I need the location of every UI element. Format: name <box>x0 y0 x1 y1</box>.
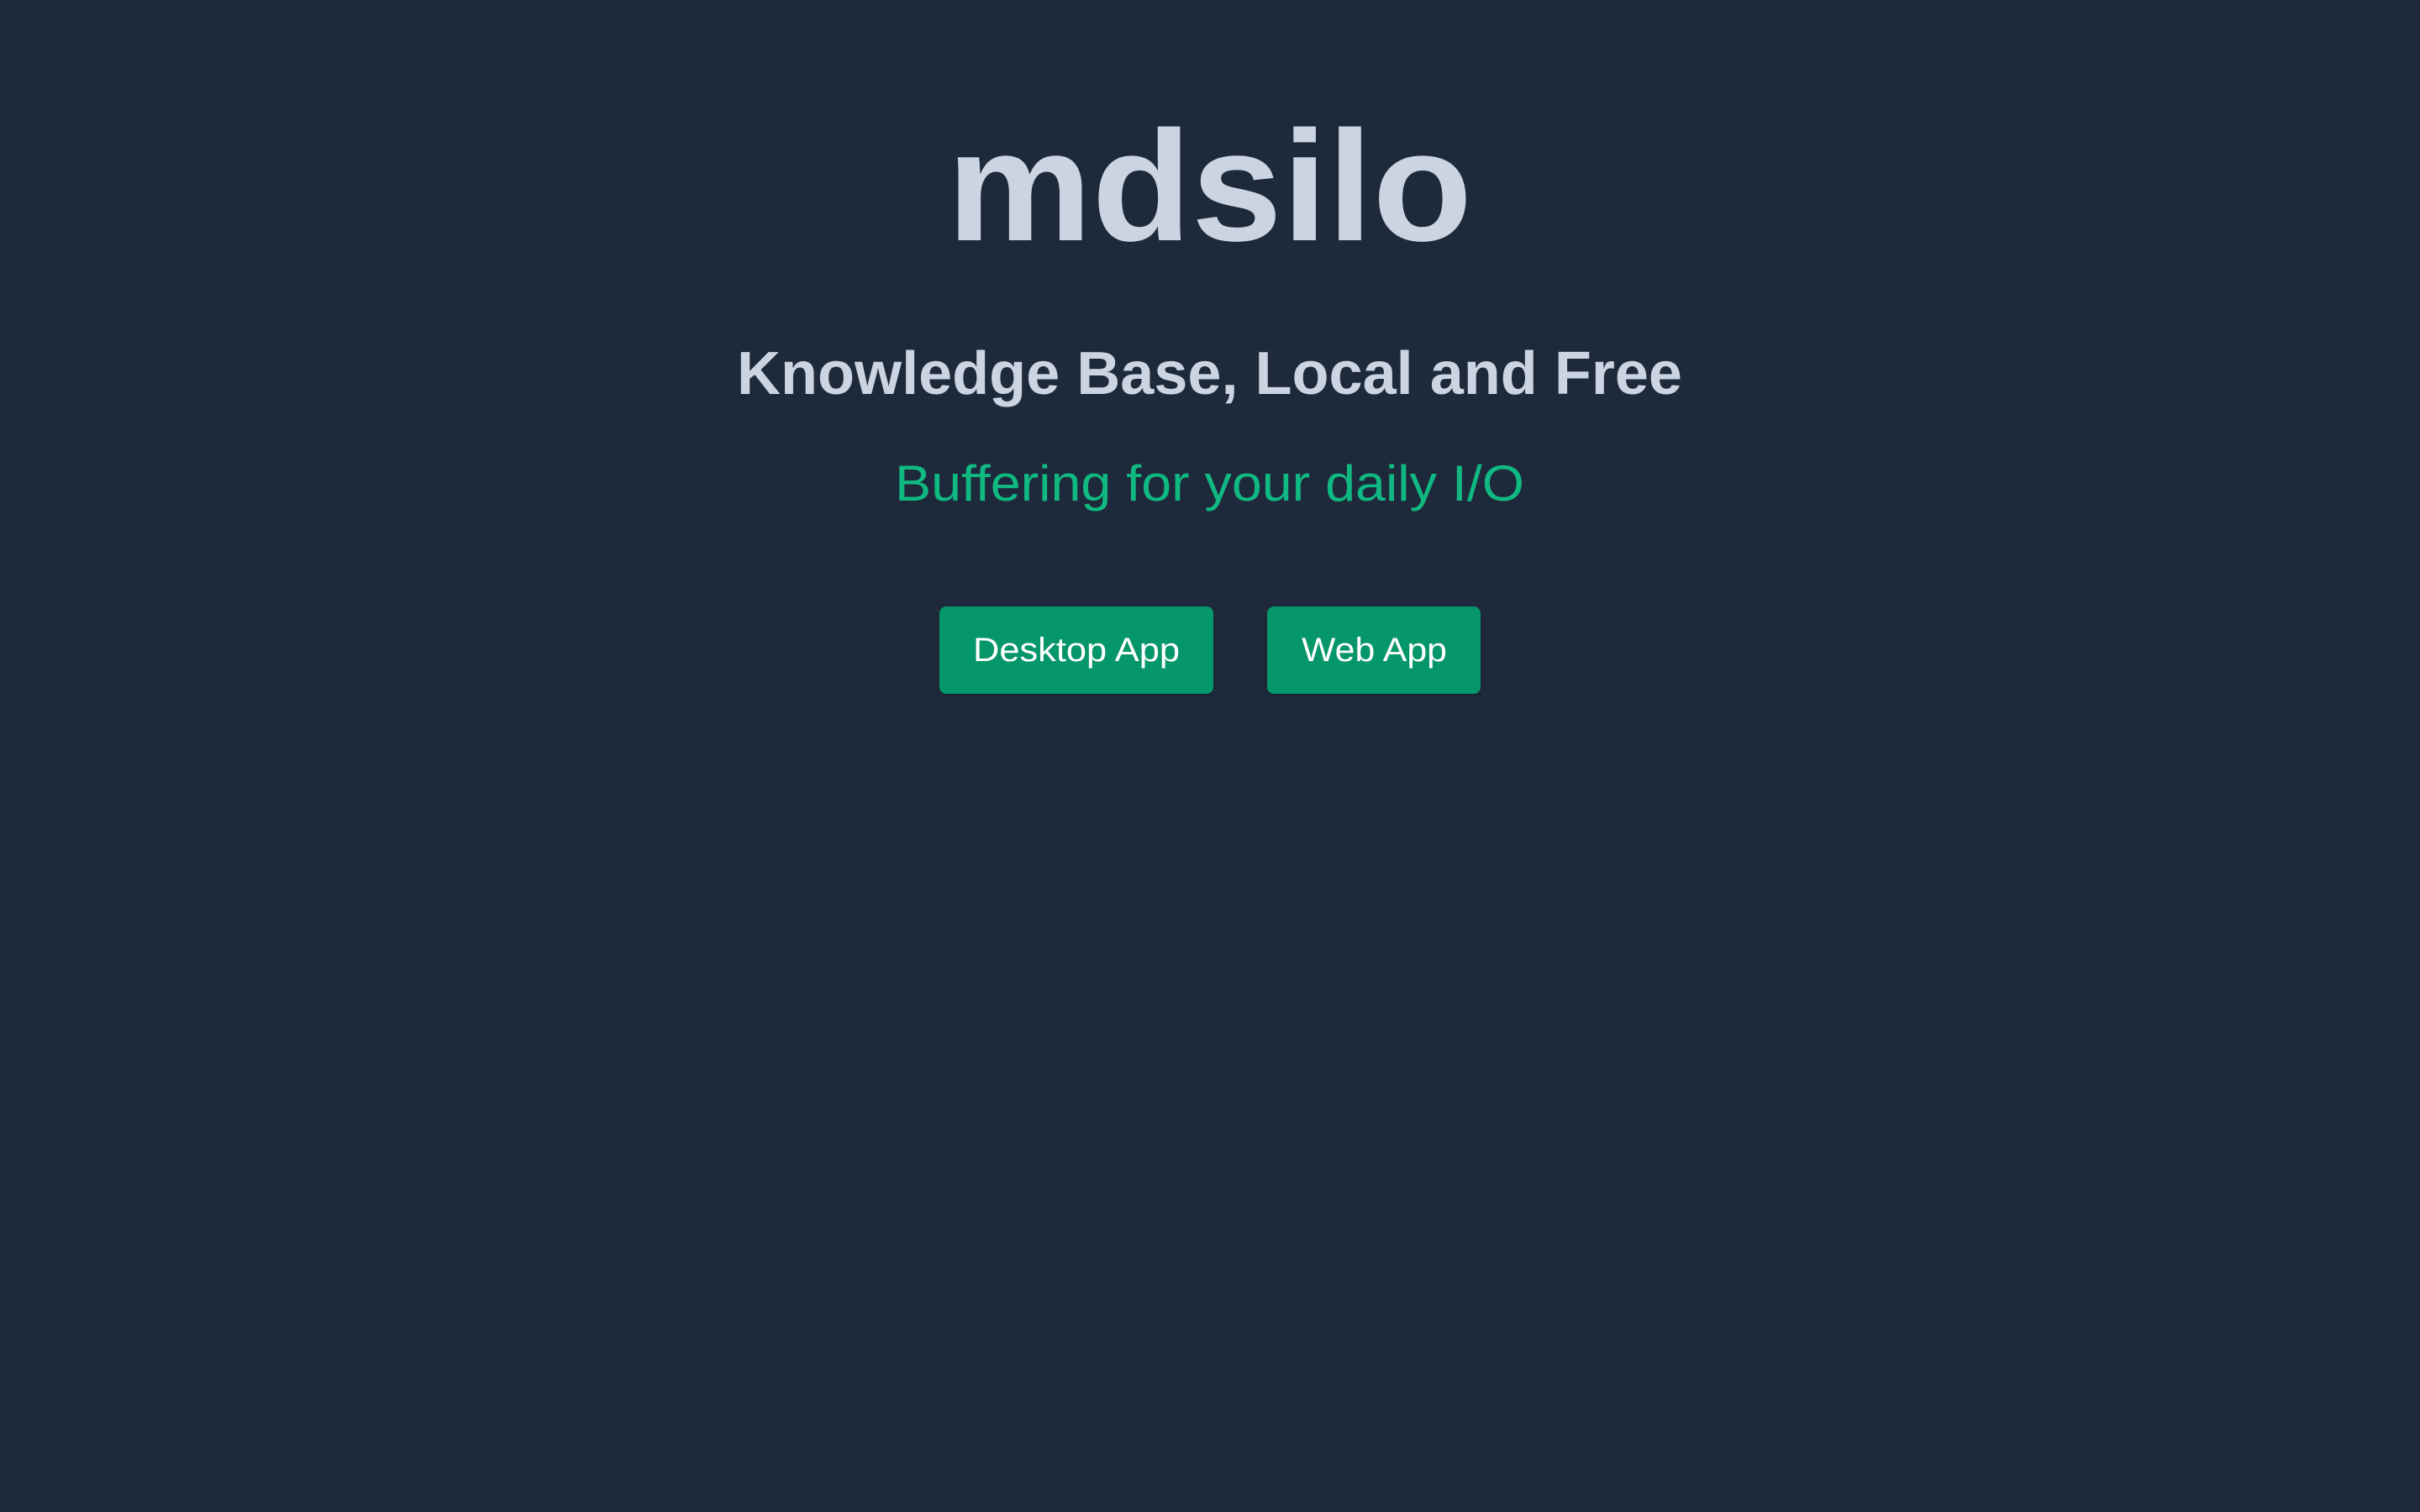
button: Web App <box>1267 606 1481 694</box>
subtitle: Knowledge Base, Local and Free <box>737 340 1682 407</box>
tagline: Buffering for your daily I/O <box>895 455 1524 512</box>
button: Web App: Web App <box>1302 632 1447 669</box>
button: Desktop App: Desktop App <box>973 632 1180 669</box>
title: mdsilo <box>947 98 1472 274</box>
button: Desktop App <box>939 606 1213 694</box>
